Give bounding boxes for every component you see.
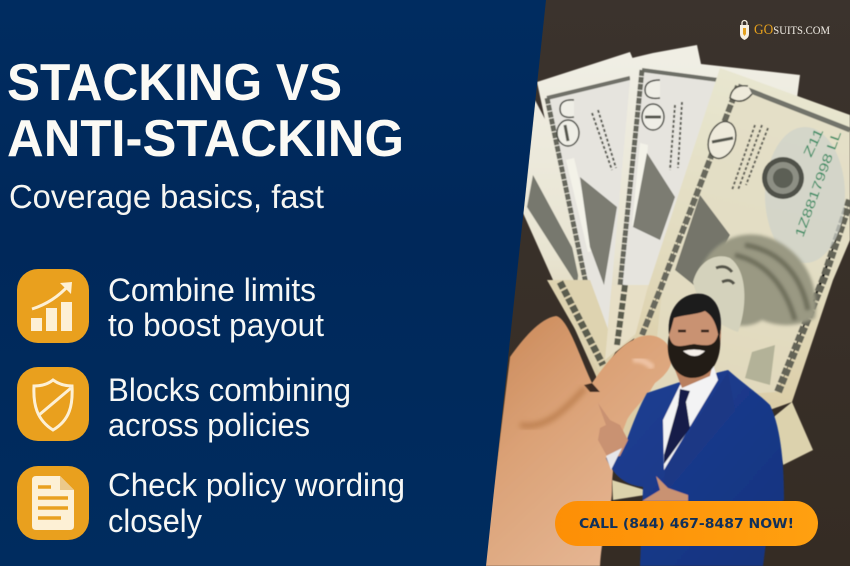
numeral zero xyxy=(557,120,579,146)
watermark oval xyxy=(765,127,845,263)
call to action button: CALL (844) 467-8487 NOW! xyxy=(579,516,794,532)
item text: Blocks combining xyxy=(108,372,351,408)
bill: second xyxy=(537,52,660,378)
item: check wording xyxy=(17,466,405,540)
treasury seal xyxy=(762,157,804,199)
eyes xyxy=(678,330,709,332)
photo: hand holding bills xyxy=(484,316,672,566)
lower ends of left bills xyxy=(547,280,650,373)
item: combine limits xyxy=(17,269,324,343)
pointing hand xyxy=(598,403,628,458)
suit xyxy=(606,370,784,566)
cuff xyxy=(606,448,622,470)
photo: fanned dollar bills xyxy=(523,45,850,500)
shadow between finger and thumb xyxy=(584,383,600,392)
bill: third xyxy=(605,45,800,360)
item text: Combine limits xyxy=(108,272,316,308)
serial numbers: Z11 xyxy=(800,126,826,159)
serial numbers xyxy=(792,126,844,239)
fingers and palm xyxy=(484,316,672,566)
smile xyxy=(683,350,705,356)
beard xyxy=(668,330,720,378)
item text: to boost payout xyxy=(108,307,324,343)
item text: closely xyxy=(108,503,202,539)
bill: lower corner xyxy=(770,402,813,465)
item text: across policies xyxy=(108,407,310,443)
numeral zero xyxy=(703,118,741,162)
small engraved label xyxy=(745,345,775,385)
photo background xyxy=(480,0,850,566)
bill: far left xyxy=(523,100,640,385)
neck xyxy=(672,358,714,388)
item text xyxy=(108,467,405,539)
attorney figure xyxy=(598,294,784,566)
numeral two xyxy=(730,86,752,101)
icon: padlock badge xyxy=(740,20,749,40)
numeral five xyxy=(645,80,660,98)
title: ANTI-STACKING xyxy=(7,110,404,168)
item text xyxy=(108,272,324,343)
icon: rising bar chart xyxy=(17,269,89,343)
logo wordmark: GOSUITS.COM xyxy=(754,22,830,38)
icon: blocked shield xyxy=(17,367,89,441)
lapel shadow xyxy=(663,372,735,495)
bill: bottom corner xyxy=(612,480,645,500)
head xyxy=(669,301,721,367)
shirt xyxy=(663,364,718,470)
title xyxy=(7,54,404,168)
hair xyxy=(669,294,721,340)
call to action button xyxy=(555,501,818,546)
engraved panel xyxy=(675,195,730,290)
icon: document xyxy=(17,466,89,540)
item: anti-stacking xyxy=(17,367,351,443)
subtitle: Coverage basics, fast xyxy=(9,178,324,215)
left navy panel xyxy=(0,0,546,566)
lower hand xyxy=(642,476,688,501)
bill: front twenty xyxy=(600,68,850,470)
title: STACKING VS xyxy=(7,54,342,112)
numeral zero xyxy=(642,104,664,130)
numeral five xyxy=(560,100,574,117)
portrait xyxy=(693,235,816,332)
item text: Check policy wording xyxy=(108,467,405,503)
logo: GoSuits.com xyxy=(740,20,830,40)
item text xyxy=(108,372,351,443)
tie xyxy=(664,389,690,464)
serial numbers: 1Z8817998 LL xyxy=(792,129,844,239)
